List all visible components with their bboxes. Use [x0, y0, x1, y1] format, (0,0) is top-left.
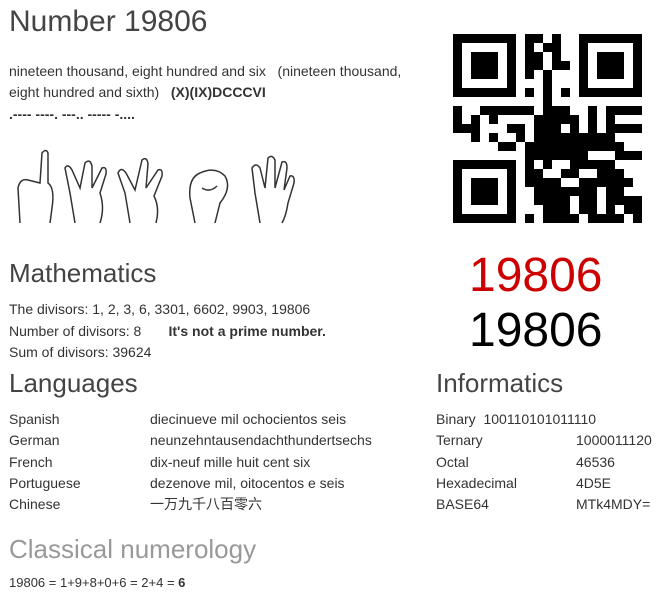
- math text: [9, 301, 326, 360]
- number red: 19806: [469, 249, 602, 302]
- languages table: Portuguese: [9, 475, 81, 491]
- math text: Number of divisors: 8 It's not a prime number.: [9, 322, 326, 338]
- text: dezenove mil, oitocentos e seis: [150, 475, 345, 491]
- informatics table: Ternary: [436, 432, 483, 448]
- informatics table: Octal: [436, 454, 469, 470]
- languages table: [9, 411, 81, 512]
- number black: 19806: [469, 304, 602, 357]
- text: 4D5E: [576, 475, 611, 491]
- informatics table: [436, 411, 596, 512]
- heading: mathematics: Mathematics: [9, 258, 156, 288]
- heading: numerology: Classical numerology: [9, 534, 256, 564]
- text: dix-neuf mille huit cent six: [150, 454, 310, 470]
- numerology text: 19806 = 1+9+8+0+6 = 2+4 = 6: [9, 575, 185, 590]
- heading: languages: Languages: [9, 368, 138, 398]
- text: MTk4MDY=: [576, 496, 650, 512]
- icon: hands: [17, 150, 295, 224]
- text: 1000011120: [576, 432, 652, 448]
- languages table: Chinese: [9, 496, 60, 512]
- text: 46536: [576, 454, 615, 470]
- languages table: French: [9, 454, 53, 470]
- math text: Sum of divisors: 39624: [9, 344, 151, 360]
- math text: The divisors: 1, 2, 3, 6, 3301, 6602, 9903, 19806: [9, 301, 310, 317]
- text block: name: nineteen thousand, eight hundred and six (nineteen thousand,: [9, 63, 401, 79]
- heading: informatics: Informatics: [436, 368, 563, 398]
- text block: name: eight hundred and sixth) (X)(IX)DCCCVI: [9, 84, 266, 100]
- morse: .---- ----. ---.. ----- -....: [9, 106, 135, 122]
- text block: name: [9, 63, 401, 100]
- text: neunzehntausendachthundertsechs: [150, 432, 372, 448]
- informatics table: Binary 100110101011110: [436, 411, 596, 427]
- title: Number 19806: [9, 5, 207, 38]
- informatics table: Hexadecimal: [436, 475, 517, 491]
- text: diecinueve mil ochocientos seis: [150, 411, 346, 427]
- languages table: German: [9, 432, 60, 448]
- languages table: Spanish: [9, 411, 60, 427]
- QR code: [453, 34, 642, 223]
- text: 一万九千八百零六: [150, 496, 262, 512]
- informatics table: BASE64: [436, 496, 489, 512]
